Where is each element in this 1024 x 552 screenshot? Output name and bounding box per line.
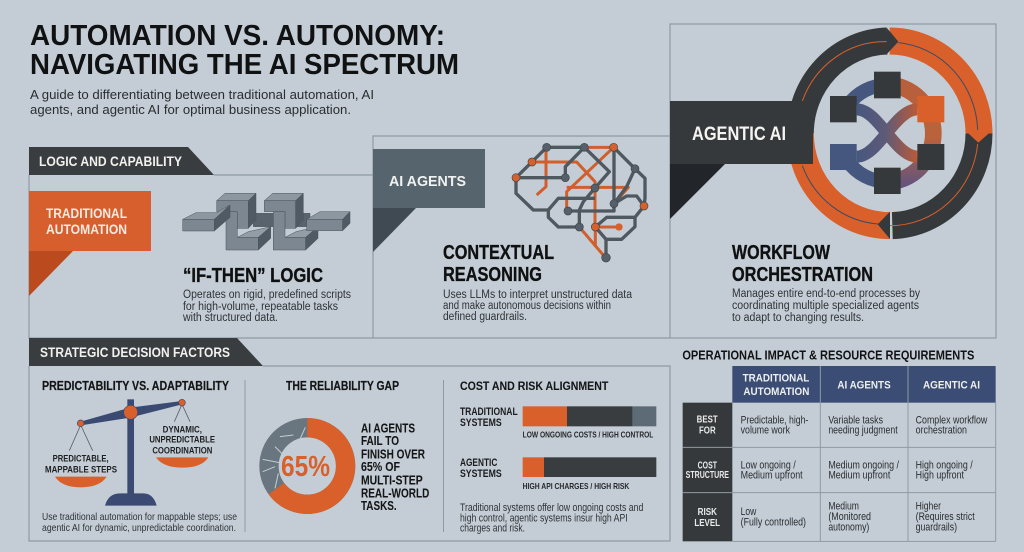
text: reliability stat: REAL-WORLD <box>361 486 429 500</box>
table row headers: FOR <box>699 425 716 436</box>
table title: OPERATIONAL IMPACT & RESOURCE REQUIREMENTS <box>682 347 975 362</box>
subtitle: agents, and agentic AI for optimal business application. <box>30 102 351 117</box>
column: reliability gap <box>263 379 429 513</box>
chart: 65 percent donut <box>263 427 346 504</box>
chart icon: balance scale <box>45 399 215 506</box>
table row headers: RISK <box>698 507 718 518</box>
text: cost guidance: charges and risk. <box>460 522 525 534</box>
icon: orchestration ring <box>800 28 993 239</box>
table body cells: guardrails) <box>916 521 957 533</box>
bar: agentic systems: HIGH API CHARGES / HIGH RISK <box>523 481 629 491</box>
panel: operational impact table <box>682 347 996 541</box>
bar: traditional systems: SYSTEMS <box>460 417 502 429</box>
table body cells: Medium <box>828 501 859 513</box>
column: cost and risk alignment <box>460 379 656 534</box>
icon: circuit brain <box>512 143 648 262</box>
heading: workflow orchestration <box>732 241 873 286</box>
table row headers: STRUCTURE <box>686 470 729 481</box>
table body cells: volume work <box>741 425 791 437</box>
table row headers: COST <box>698 460 717 471</box>
tag: ai agents <box>373 149 485 252</box>
table body cells: (Fully controlled) <box>741 516 806 528</box>
bar: agentic systems: AGENTIC <box>460 457 498 469</box>
text: if-then description: for high-volume, repeatable tasks <box>183 301 338 313</box>
table header row: AGENTIC AI <box>923 380 980 392</box>
table body cells: Medium upfront <box>741 470 803 482</box>
table header row: AI AGENTS <box>837 380 891 392</box>
text: workflow orchestration description: to adapt to changing results. <box>732 312 864 324</box>
panel: strategic decision factors <box>29 338 670 541</box>
section heading: logic and capability: LOGIC AND CAPABILITY <box>39 154 182 169</box>
table body cells <box>732 403 996 541</box>
text: contextual reasoning description: and make autonomous decisions within <box>443 300 611 312</box>
bar: agentic systems <box>460 457 656 491</box>
tag: traditional automation: TRADITIONAL <box>46 206 127 221</box>
table body cells: Predictable, high- <box>741 414 809 426</box>
text: predictability guidance: Use traditional automation for mappable steps; use <box>42 511 237 523</box>
table body cells: Low ongoing / <box>741 460 796 472</box>
heading: contextual reasoning: CONTEXTUAL <box>443 241 554 264</box>
table body cells: needing judgment <box>828 425 898 437</box>
tag: agentic ai <box>670 101 813 219</box>
title <box>30 20 459 81</box>
chart icon: balance scale: COORDINATION <box>152 446 213 456</box>
table body cells: High ongoing / <box>916 460 973 472</box>
column: predictability vs adaptability: PREDICTABILITY VS. ADAPTABILITY <box>42 379 230 393</box>
heading: contextual reasoning <box>443 241 554 286</box>
bar: traditional systems: TRADITIONAL <box>460 406 518 418</box>
text: reliability stat <box>361 421 429 513</box>
table body cells: Variable tasks <box>828 414 883 426</box>
tag: ai agents: AI AGENTS <box>389 173 466 190</box>
section heading: logic and capability <box>29 147 214 175</box>
text: reliability stat: FAIL TO <box>361 434 399 448</box>
table body cells: Medium upfront <box>828 470 890 482</box>
text: predictability guidance: agentic AI for dynamic, unpredictable coordination. <box>42 522 236 534</box>
subtitle <box>30 87 374 117</box>
text: cost guidance <box>460 502 643 534</box>
heading: contextual reasoning: REASONING <box>443 263 542 286</box>
column: predictability vs adaptability <box>42 379 237 534</box>
table row headers <box>683 403 732 541</box>
chart: 65 percent donut: 65% <box>281 451 330 483</box>
chart icon: balance scale: UNPREDICTABLE <box>149 435 215 445</box>
table body cells: autonomy) <box>828 521 869 533</box>
panel: ai agents <box>373 136 670 338</box>
text: reliability stat: FINISH OVER <box>361 447 425 461</box>
text: if-then description <box>182 289 351 324</box>
icon: if-then blocks <box>183 193 350 250</box>
tag: traditional automation <box>29 191 151 296</box>
tag: traditional automation: AUTOMATION <box>46 222 127 237</box>
column: cost and risk alignment: COST AND RISK ALIGNMENT <box>460 379 609 393</box>
panel: agentic ai <box>670 24 996 338</box>
text: workflow orchestration description <box>732 288 920 324</box>
table body cells: Higher <box>916 501 941 513</box>
text: cost guidance: high control, agentic systems insur high API <box>460 512 628 524</box>
table body cells: Medium ongoing / <box>828 460 899 472</box>
chart icon: balance scale: PREDICTABLE, <box>53 454 109 464</box>
tag: agentic ai: AGENTIC AI <box>692 124 786 145</box>
table row headers: BEST <box>697 415 718 426</box>
title: AUTOMATION VS. AUTONOMY: <box>30 20 445 52</box>
table body cells: Complex workflow <box>916 414 988 426</box>
text: workflow orchestration description: Manages entire end-to-end processes by <box>732 288 920 300</box>
title: NAVIGATING THE AI SPECTRUM <box>30 49 459 81</box>
heading: if-then logic: “IF-THEN” LOGIC <box>183 265 323 287</box>
section heading: strategic decision factors: STRATEGIC DECISION FACTORS <box>40 345 230 360</box>
bar: agentic systems: SYSTEMS <box>460 468 502 480</box>
table header row <box>732 366 996 403</box>
text: reliability stat: 65% OF <box>361 460 400 474</box>
panel: logic and capability <box>29 147 670 338</box>
column: reliability gap: THE RELIABILITY GAP <box>286 379 399 393</box>
heading: workflow orchestration: WORKFLOW <box>732 241 831 264</box>
table body cells: Low <box>741 506 757 518</box>
text: contextual reasoning description: Uses LLMs to interpret unstructured data <box>443 289 633 301</box>
table header row: AUTOMATION <box>743 386 809 398</box>
heading: workflow orchestration: ORCHESTRATION <box>732 263 873 286</box>
text: reliability stat: TASKS. <box>361 499 397 513</box>
text: reliability stat: MULTI-STEP <box>361 473 423 487</box>
subtitle: A guide to differentiating between traditional automation, AI <box>30 87 374 102</box>
text: contextual reasoning description <box>443 289 633 323</box>
table body cells: (Monitored <box>828 511 871 523</box>
text: predictability guidance <box>42 511 237 534</box>
table body cells: High upfront <box>916 470 964 482</box>
text: workflow orchestration description: coordinating multiple specialized agents <box>732 300 919 312</box>
table body cells: (Requires strict <box>916 511 975 523</box>
text: reliability stat: AI AGENTS <box>361 421 415 435</box>
table row headers: LEVEL <box>694 518 720 529</box>
table header row: TRADITIONAL <box>743 373 809 385</box>
text: if-then description: with structured data. <box>182 312 278 324</box>
chart icon: balance scale: MAPPABLE STEPS <box>45 465 117 475</box>
text: if-then description: Operates on rigid, predefined scripts <box>183 289 351 301</box>
text: contextual reasoning description: defined guardrails. <box>443 311 527 323</box>
bar: traditional systems <box>460 406 656 440</box>
table body cells: orchestration <box>916 425 967 437</box>
bar: traditional systems: LOW ONGOING COSTS / HIGH CONTROL <box>523 430 653 440</box>
section heading: strategic decision factors <box>29 338 263 366</box>
chart icon: balance scale: DYNAMIC, <box>163 424 202 434</box>
text: cost guidance: Traditional systems offer low ongoing costs and <box>460 502 643 514</box>
